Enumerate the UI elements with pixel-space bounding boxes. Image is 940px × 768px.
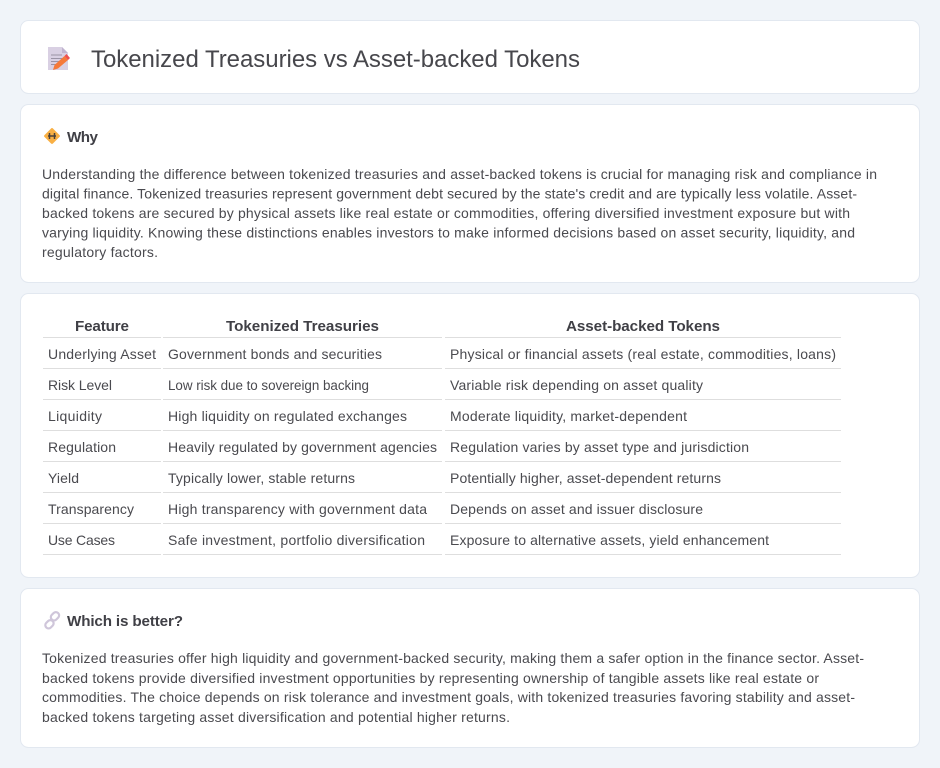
panel: comparison table xyxy=(20,294,920,578)
row: underlying asset: Physical or financial assets (real estate, commodities, loans) xyxy=(450,346,836,362)
row: transparency: Transparency xyxy=(48,501,134,517)
row: regulation xyxy=(48,439,749,455)
icon: memo with pencil xyxy=(48,47,70,70)
title: Tokenized Treasuries vs Asset-backed Tokens xyxy=(91,46,580,73)
row: yield: Typically lower, stable returns xyxy=(168,470,355,486)
row: risk level: Variable risk depending on asset quality xyxy=(450,377,703,393)
panel: why xyxy=(20,104,920,282)
text block: which is better paragraph: Tokenized treasuries offer high liquidity and government-backed security, making them a safer option in the finance sector. Asset- xyxy=(42,650,864,666)
row: liquidity: Liquidity xyxy=(48,408,102,424)
row: transparency: High transparency with government data xyxy=(168,501,427,517)
panel: header xyxy=(20,20,920,94)
row: risk level: Low risk due to sovereign backing xyxy=(168,378,369,393)
row: yield: Potentially higher, asset-dependent returns xyxy=(450,470,721,486)
text block: why paragraph: Understanding the difference between tokenized treasuries and asset-backed tokens is crucial for managing risk and compliance in xyxy=(42,166,877,182)
panel: which is better xyxy=(20,588,920,748)
icon: link xyxy=(44,611,60,630)
text block: which is better paragraph: backed tokens targeting asset diversification and potential higher returns. xyxy=(42,709,510,725)
table header row xyxy=(75,318,720,335)
row: underlying asset: Underlying Asset xyxy=(48,346,156,362)
row: risk level: Risk Level xyxy=(48,377,112,393)
table header row: Asset-backed Tokens xyxy=(566,318,720,335)
text block: why paragraph: digital finance. Tokenized treasuries represent government debt secured by the state's credit and are typically less volatile. Asset- xyxy=(42,186,857,202)
row: transparency xyxy=(48,501,703,517)
row: underlying asset: Government bonds and securities xyxy=(168,346,382,362)
row: regulation: Regulation xyxy=(48,439,116,455)
row: risk level xyxy=(48,377,703,393)
text block: why paragraph: varying liquidity. Knowing these distinctions enables investors to make informed decisions based on asset security, liquidity, and xyxy=(42,224,855,240)
icon: orange diamond sign xyxy=(44,128,60,144)
text block: which is better paragraph: commodities. The choice depends on risk tolerance and investment goals, with tokenized treasuries favoring stability and asset- xyxy=(42,689,855,705)
table header row: Tokenized Treasuries xyxy=(226,318,379,335)
row: liquidity xyxy=(48,408,687,424)
table header row: Feature xyxy=(75,318,129,335)
row: regulation: Heavily regulated by government agencies xyxy=(168,439,437,455)
text block: why paragraph: backed tokens are secured by physical assets like real estate or commodities, offering diversified investment exposure but with xyxy=(42,205,850,221)
heading: which is better: Which is better? xyxy=(67,613,183,630)
text block: which is better paragraph: backed tokens provide diversified investment opportunities by representing ownership of tangible assets like real estate or xyxy=(42,670,819,686)
row: use cases: Exposure to alternative assets, yield enhancement xyxy=(450,532,769,548)
row: yield: Yield xyxy=(48,470,79,486)
text block: why paragraph: regulatory factors. xyxy=(42,244,158,260)
text block: which is better paragraph xyxy=(42,650,864,725)
row: use cases: Use Cases xyxy=(48,532,115,548)
row: transparency: Depends on asset and issuer disclosure xyxy=(450,501,703,517)
row: liquidity: High liquidity on regulated exchanges xyxy=(168,408,407,424)
row: liquidity: Moderate liquidity, market-dependent xyxy=(450,408,687,424)
row: underlying asset xyxy=(48,346,836,362)
row: use cases xyxy=(48,532,769,548)
row: use cases: Safe investment, portfolio diversification xyxy=(168,532,425,548)
text block: why paragraph xyxy=(42,166,877,260)
row: yield xyxy=(48,470,721,486)
heading: why: Why xyxy=(67,129,99,146)
row: regulation: Regulation varies by asset type and jurisdiction xyxy=(450,439,749,455)
